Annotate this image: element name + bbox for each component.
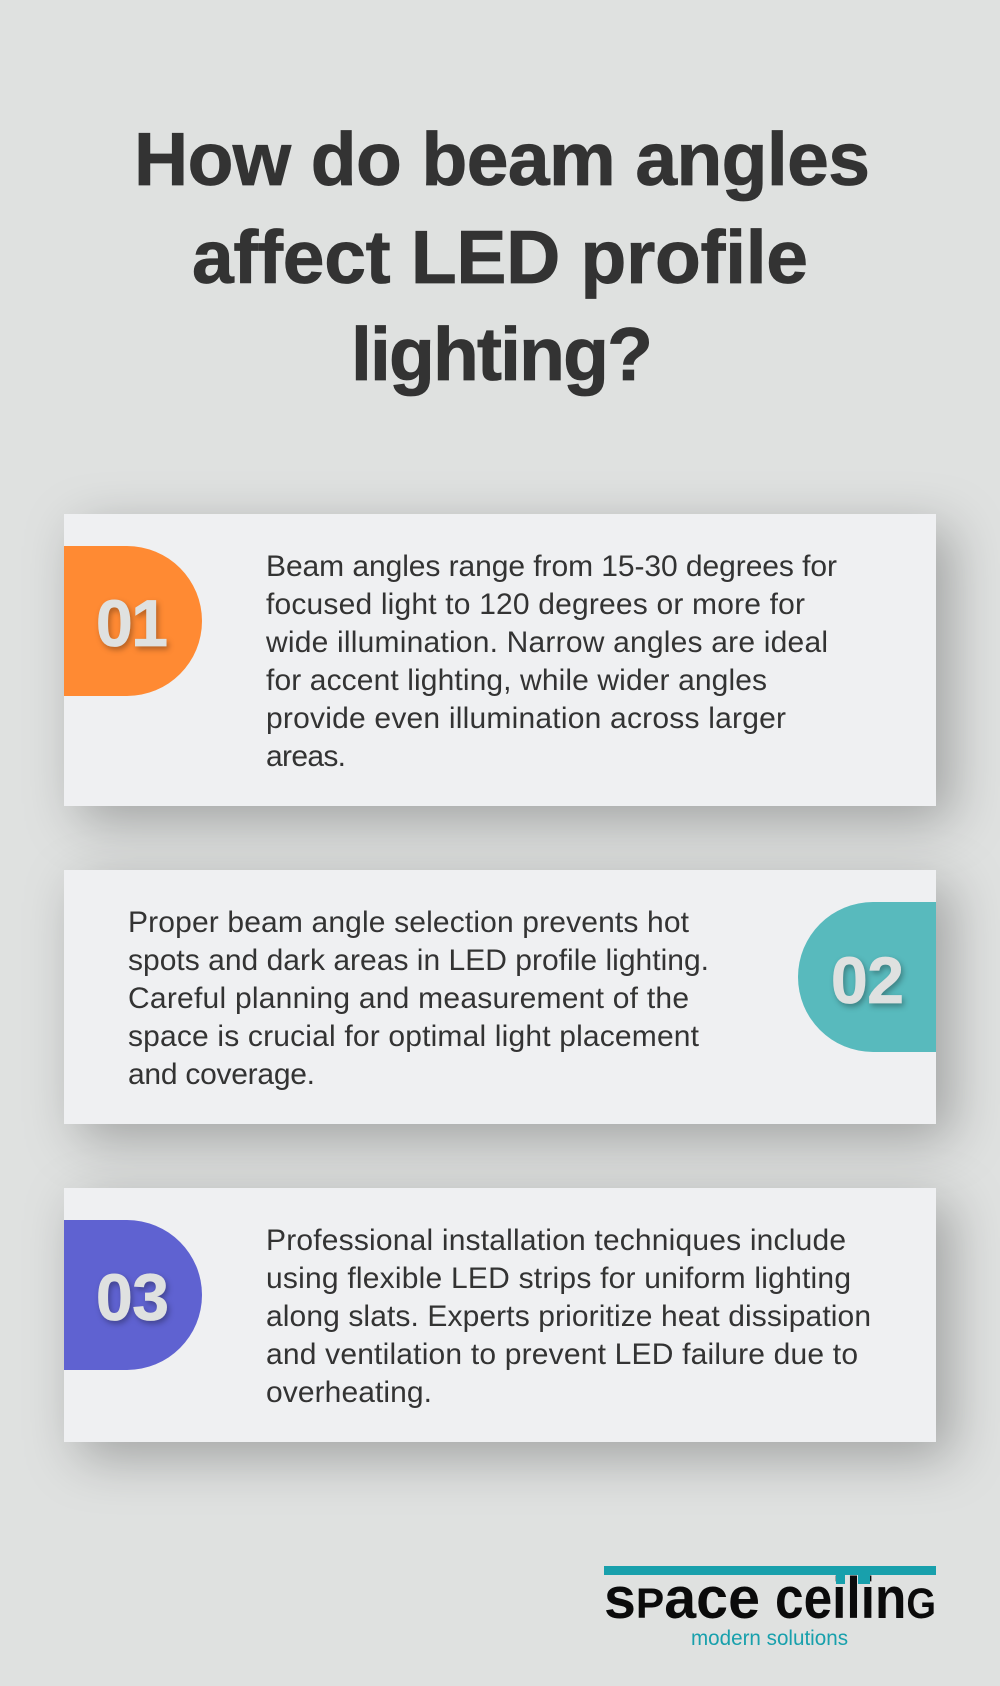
text block: step 03: along slats. Experts prioritize heat dissipation [266, 1300, 871, 1333]
panel: step 02 [64, 870, 936, 1124]
text block: step 02: space is crucial for optimal light placement [128, 1020, 700, 1053]
text block: step 03 [266, 1224, 871, 1409]
logo: space ceiling [604, 1566, 936, 1650]
text block: step 01: Beam angles range from 15-30 degrees for [266, 550, 837, 583]
text block: step 02: Careful planning and measurement of the [128, 982, 689, 1015]
text block: step 02: Proper beam angle selection prevents hot [128, 906, 690, 939]
panel: step 03 [64, 1188, 936, 1442]
text block: step 01: for accent lighting, while wider angles [266, 664, 767, 697]
text block: step 01 [265, 550, 837, 773]
text block: step 03: and ventilation to prevent LED failure due to [266, 1338, 858, 1371]
text block: step 01: areas. [266, 740, 346, 773]
title [134, 117, 870, 396]
badge: 02: 02 [831, 943, 904, 1017]
panel: step 01 [64, 514, 936, 806]
title: affect LED profile [192, 215, 808, 299]
text block: step 02: spots and dark areas in LED profile lighting. [128, 944, 709, 977]
title: How do beam angles [134, 117, 870, 201]
badge: 02 [798, 902, 936, 1052]
text block: step 02 [128, 906, 709, 1091]
title: lighting? [351, 312, 653, 396]
badge: 03: 03 [96, 1260, 169, 1334]
text block: step 01: focused light to 120 degrees or more for [266, 588, 805, 621]
text block: step 02: and coverage. [128, 1058, 315, 1091]
text block: step 03: using flexible LED strips for uniform lighting [266, 1262, 851, 1295]
logo: space ceiling: modern solutions [691, 1627, 848, 1650]
text block: step 03: overheating. [266, 1376, 432, 1409]
text block: step 01: wide illumination. Narrow angles are ideal [265, 626, 828, 659]
badge: 01: 01 [96, 586, 168, 660]
badge: 03 [64, 1220, 202, 1370]
badge: 01 [64, 546, 202, 696]
text block: step 03: Professional installation techniques include [266, 1224, 846, 1257]
logo: space ceiling: sPace [604, 1566, 760, 1631]
text block: step 01: provide even illumination across larger [266, 702, 786, 735]
logo: space ceiling: ceilinG [775, 1566, 936, 1631]
